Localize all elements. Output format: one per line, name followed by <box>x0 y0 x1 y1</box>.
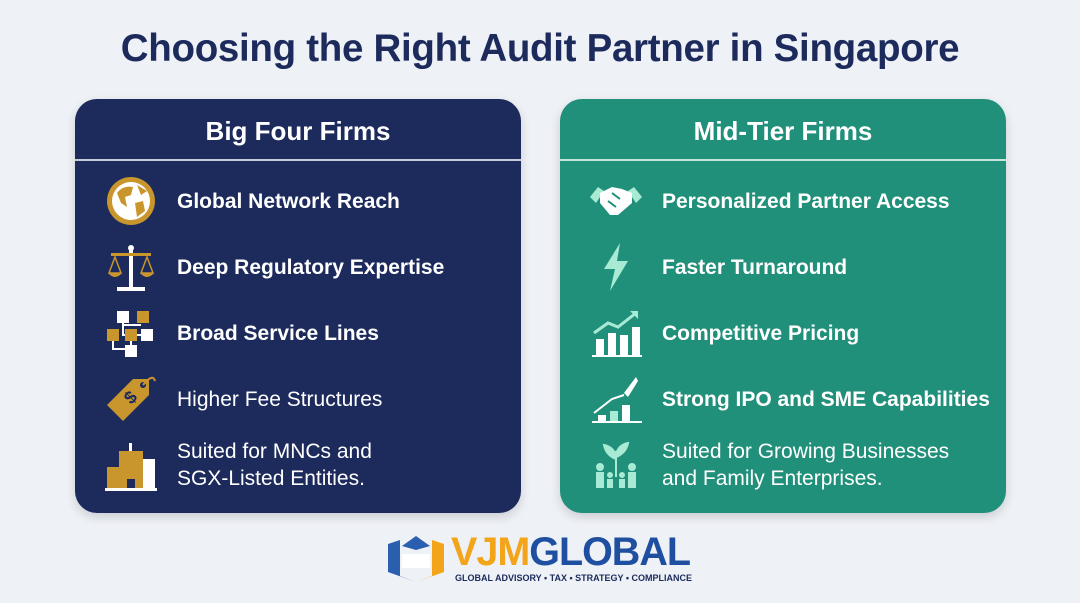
item: pricing <box>592 311 859 357</box>
item: MNCs <box>105 440 372 491</box>
item: regulatory <box>108 245 444 291</box>
item: pricing: Competitive Pricing <box>662 322 859 344</box>
heading: big four: Big Four Firms <box>206 116 390 146</box>
heading: big four <box>75 99 521 161</box>
item: turnaround: Faster Turnaround <box>662 256 847 278</box>
heading: mid-tier <box>560 99 1006 161</box>
icon: logo mark <box>388 536 444 582</box>
logo: VJM Global <box>388 530 692 583</box>
item: MNCs: SGX-Listed Entities. <box>177 467 365 490</box>
item: fees <box>107 376 382 421</box>
item: service lines: Broad Service Lines <box>177 322 379 344</box>
item: growing businesses: Suited for Growing Businesses <box>662 440 949 463</box>
item: partner access: Personalized Partner Access <box>662 190 950 212</box>
item: IPO SME: Strong IPO and SME Capabilities <box>662 388 990 410</box>
title: Choosing the Right Audit Partner in Singapore <box>121 27 959 70</box>
item: fees: $ <box>120 387 141 408</box>
item: global network <box>107 177 400 225</box>
item: growing businesses <box>596 440 949 490</box>
item: global network: Global Network Reach <box>177 190 400 212</box>
item: fees: Higher Fee Structures <box>177 388 382 410</box>
item: regulatory: Deep Regulatory Expertise <box>177 256 444 278</box>
item: IPO SME <box>592 377 990 423</box>
item: growing businesses: and Family Enterprises. <box>662 467 883 490</box>
item: turnaround <box>604 243 847 291</box>
item: service lines <box>107 311 379 357</box>
heading: mid-tier: Mid-Tier Firms <box>694 116 872 146</box>
tagline: GLOBAL ADVISORY • TAX • STRATEGY • COMPLIANCE <box>455 573 692 583</box>
panel: big four firms <box>75 99 521 513</box>
item: MNCs: Suited for MNCs and <box>177 440 372 463</box>
panel: mid-tier firms <box>560 99 1006 513</box>
item: partner access <box>590 187 950 215</box>
logo text: VJMGLOBAL <box>451 530 690 574</box>
